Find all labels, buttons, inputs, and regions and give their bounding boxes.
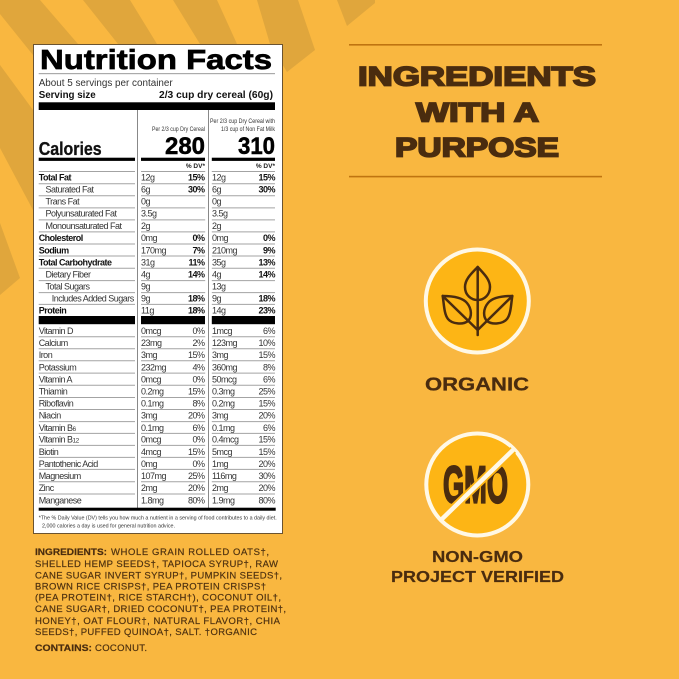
vitamins and minerals rows: 0mg xyxy=(141,459,158,469)
macronutrient rows: 15% xyxy=(258,172,275,182)
heading: ingredients with a purpose xyxy=(349,44,602,177)
vitamins and minerals rows: 116mg xyxy=(212,471,237,481)
macronutrient rows: 210mg xyxy=(212,245,238,255)
macronutrient rows: Total Carbohydrate xyxy=(39,257,112,267)
label: non-GMO project verified xyxy=(391,549,564,586)
footnote: *The % Daily Value (DV) tells you how much a nutrient in a serving of food contributes to a daily diet. xyxy=(39,515,277,521)
macronutrient rows: 9g xyxy=(141,281,151,291)
vitamins and minerals rows: 15% xyxy=(188,447,205,457)
background stripes xyxy=(0,0,375,295)
macronutrient rows: 170mg xyxy=(141,245,167,255)
footnote xyxy=(39,515,277,529)
vitamins and minerals rows: 6% xyxy=(263,326,275,336)
macronutrient rows: Trans Fat xyxy=(46,197,80,207)
vitamins and minerals rows: 50mcg xyxy=(212,374,237,384)
vitamins and minerals rows: 1.8mg xyxy=(141,495,164,505)
vitamins and minerals rows: Potassium xyxy=(39,362,76,372)
ingredients list: INGREDIENTS: xyxy=(35,547,107,558)
macronutrient rows: Total Sugars xyxy=(46,281,91,291)
vitamins and minerals rows: 1mg xyxy=(212,459,229,469)
macronutrient rows: 23% xyxy=(258,306,275,316)
row separator lines xyxy=(39,172,275,494)
macronutrient rows: Total Fat xyxy=(39,172,72,182)
ingredients list: WHOLE GRAIN ROLLED OATS†, xyxy=(111,547,269,558)
vitamins and minerals rows: 0.3mg xyxy=(212,387,235,397)
vitamins and minerals rows: 4% xyxy=(192,362,205,372)
macronutrient rows: 6g xyxy=(212,184,222,194)
vitamins and minerals rows: 15% xyxy=(258,435,275,445)
vitamins and minerals rows: 80% xyxy=(258,495,275,505)
ingredients list: SHELLED HEMP SEEDS†, TAPIOCA SYRUP†, RAW xyxy=(35,559,278,570)
vitamins and minerals rows: Magnesium xyxy=(39,471,81,481)
ingredients list: HONEY†, OAT FLOUR†, NATURAL FLAVOR†, CHIA xyxy=(35,616,281,627)
panel: nutrition facts label xyxy=(34,44,282,534)
percent daily value header xyxy=(186,163,275,170)
macronutrient rows: 2g xyxy=(212,221,222,231)
vitamins and minerals rows: 3mg xyxy=(141,411,158,421)
ingredients list xyxy=(35,547,286,638)
ingredients list: CANE SUGAR†, DRIED COCONUT†, PEA PROTEIN†, xyxy=(35,604,286,615)
macronutrient rows: 0mg xyxy=(141,233,158,243)
vitamins and minerals rows: 6% xyxy=(263,374,275,384)
vitamins and minerals rows: 0% xyxy=(192,326,205,336)
macronutrient rows: 18% xyxy=(188,294,205,304)
vitamins and minerals rows: 0.2mg xyxy=(212,399,235,409)
macronutrient rows: Dietary Fiber xyxy=(46,269,91,279)
vitamins and minerals rows: 8% xyxy=(263,362,275,372)
macronutrient rows: Sodium xyxy=(39,245,69,255)
macronutrient rows: Cholesterol xyxy=(39,233,83,243)
vitamins and minerals rows: Thiamin xyxy=(39,387,68,397)
macronutrient rows: 30% xyxy=(188,184,205,194)
vitamins and minerals rows: 3mg xyxy=(141,350,158,360)
vitamins and minerals rows: 8% xyxy=(192,399,205,409)
macronutrient rows: 0g xyxy=(212,197,222,207)
macronutrient rows: 14% xyxy=(188,269,205,279)
contains statement xyxy=(35,643,147,654)
macronutrient rows: 12g xyxy=(141,172,155,182)
macronutrient rows: 18% xyxy=(188,306,205,316)
vitamins and minerals rows: Iron xyxy=(39,350,53,360)
vitamins and minerals rows: 0% xyxy=(192,435,205,445)
macronutrient rows: 13% xyxy=(258,257,275,267)
macronutrient rows: 0g xyxy=(141,197,151,207)
vitamins and minerals rows: 0mcg xyxy=(141,326,162,336)
macronutrient rows: 0% xyxy=(263,233,275,243)
ingredients list: (PEA PROTEIN†, RICE STARCH†), COCONUT OIL†, xyxy=(35,593,281,604)
macronutrient rows: 11g xyxy=(141,306,154,316)
icon: non-GMO xyxy=(426,434,528,536)
macronutrient rows: 4g xyxy=(212,269,222,279)
vitamins and minerals rows xyxy=(39,326,275,505)
vitamins and minerals rows: Riboflavin xyxy=(39,399,74,409)
vitamins and minerals rows: 6% xyxy=(192,423,205,433)
vitamins and minerals rows: 10% xyxy=(258,338,275,348)
macronutrient rows: Monounsaturated Fat xyxy=(46,221,123,231)
serving size: 2/3 cup dry cereal (60g) xyxy=(159,90,273,101)
column header: with milk: 310 xyxy=(238,133,275,160)
serving size xyxy=(39,90,273,101)
vitamins and minerals rows: 0.1mg xyxy=(141,399,164,409)
macronutrient rows: 0mg xyxy=(212,233,229,243)
vitamins and minerals rows: 3mg xyxy=(212,411,229,421)
macronutrient rows: 18% xyxy=(258,294,275,304)
vitamins and minerals rows: 5mcg xyxy=(212,447,233,457)
macronutrient rows: 9% xyxy=(263,245,275,255)
column header: with milk: 1/3 cup of Non Fat Milk xyxy=(221,126,276,133)
vitamins and minerals rows: 23mg xyxy=(141,338,162,348)
vitamins and minerals rows: 0mcg xyxy=(141,435,162,445)
vitamins and minerals rows: 80% xyxy=(188,495,205,505)
macronutrient rows: Saturated Fat xyxy=(46,184,95,194)
calories label: Calories xyxy=(39,139,102,159)
column header: dry cereal xyxy=(152,126,205,160)
vitamins and minerals rows: 15% xyxy=(188,350,205,360)
black divider bars xyxy=(39,316,275,324)
contains statement: CONTAINS: xyxy=(35,643,92,654)
vitamins and minerals rows: 15% xyxy=(258,350,275,360)
vitamins and minerals rows: 0% xyxy=(192,459,205,469)
vitamins and minerals rows: 0.1mg xyxy=(141,423,164,433)
macronutrient rows xyxy=(39,172,275,316)
icon: non-GMO: GMO xyxy=(443,456,508,514)
vitamins and minerals rows: Vitamin B12 xyxy=(39,435,80,445)
vitamins and minerals rows: 3mg xyxy=(212,350,229,360)
vitamins and minerals rows: 4mcg xyxy=(141,447,162,457)
macronutrient rows: 0% xyxy=(192,233,205,243)
vitamins and minerals rows: 6% xyxy=(263,423,275,433)
column header: with milk xyxy=(210,118,276,160)
macronutrient rows: 11% xyxy=(188,257,205,267)
vitamins and minerals rows: 0mcg xyxy=(141,374,162,384)
macronutrient rows: 13g xyxy=(212,281,226,291)
macronutrient rows: 31g xyxy=(141,257,155,267)
ingredients list: SEEDS†, PUFFED QUINOA†, SALT. †ORGANIC xyxy=(35,627,257,638)
vitamins and minerals rows: 20% xyxy=(258,483,275,493)
heading: ingredients with a purpose: WITH A xyxy=(416,98,539,128)
vitamins and minerals rows: 20% xyxy=(258,459,275,469)
servings per container: About 5 servings per container xyxy=(39,78,173,89)
vitamins and minerals rows: 15% xyxy=(188,387,205,397)
macronutrient rows: 9g xyxy=(212,294,222,304)
vitamins and minerals rows: 30% xyxy=(258,471,275,481)
macronutrient rows: 6g xyxy=(141,184,151,194)
heading: ingredients with a purpose: INGREDIENTS xyxy=(358,62,596,92)
vitamins and minerals rows: 25% xyxy=(258,387,275,397)
vitamins and minerals rows: 0% xyxy=(192,374,205,384)
macronutrient rows: 14% xyxy=(258,269,275,279)
macronutrient rows: 3.5g xyxy=(212,209,228,219)
label: non-GMO project verified: PROJECT VERIFIED xyxy=(391,569,564,586)
vitamins and minerals rows: 1.9mg xyxy=(212,495,235,505)
macronutrient rows: 14g xyxy=(212,306,226,316)
macronutrient rows: Polyunsaturated Fat xyxy=(46,209,118,219)
vitamins and minerals rows: 20% xyxy=(188,483,205,493)
title: Nutrition Facts: Nutrition Facts xyxy=(40,44,272,75)
vitamins and minerals rows: Biotin xyxy=(39,447,59,457)
vitamins and minerals rows: Vitamin B6 xyxy=(39,423,77,433)
macronutrient rows: 3.5g xyxy=(141,209,157,219)
column header: with milk: Per 2/3 cup Dry Cereal with xyxy=(210,118,275,125)
macronutrient rows: 9g xyxy=(141,294,151,304)
vitamins and minerals rows: Zinc xyxy=(39,483,55,493)
column header: dry cereal: Per 2/3 cup Dry Cereal xyxy=(152,126,205,133)
vitamins and minerals rows: Niacin xyxy=(39,411,61,421)
macronutrient rows: 12g xyxy=(212,172,226,182)
vitamins and minerals rows: 25% xyxy=(188,471,205,481)
vitamins and minerals rows: 2mg xyxy=(141,483,158,493)
serving size: Serving size xyxy=(39,90,96,101)
vitamins and minerals rows: 107mg xyxy=(141,471,167,481)
vitamins and minerals rows: Pantothenic Acid xyxy=(39,459,98,469)
vitamins and minerals rows: 0.4mcg xyxy=(212,435,239,445)
column header: dry cereal: 280 xyxy=(165,133,205,160)
vitamins and minerals rows: 123mg xyxy=(212,338,238,348)
vitamins and minerals rows: 2% xyxy=(192,338,205,348)
macronutrient rows: Protein xyxy=(39,306,66,316)
vitamins and minerals rows: 1mcg xyxy=(212,326,233,336)
label: organic: ORGANIC xyxy=(425,374,529,394)
vitamins and minerals rows: 15% xyxy=(258,447,275,457)
macronutrient rows: 15% xyxy=(188,172,205,182)
vitamins and minerals rows: Manganese xyxy=(39,495,82,505)
macronutrient rows: Includes Added Sugars xyxy=(52,294,135,304)
macronutrient rows: 35g xyxy=(212,257,226,267)
macronutrient rows: 2g xyxy=(141,221,151,231)
vitamins and minerals rows: Vitamin D xyxy=(39,326,74,336)
vitamins and minerals rows: 15% xyxy=(258,399,275,409)
ingredients list: BROWN RICE CRISPS†, PEA PROTEIN CRISPS† xyxy=(35,582,266,592)
vitamins and minerals rows: 0.1mg xyxy=(212,423,235,433)
label: non-GMO project verified: NON-GMO xyxy=(432,549,523,566)
vitamins and minerals rows: Calcium xyxy=(39,338,68,348)
contains statement: COCONUT. xyxy=(95,643,147,654)
vitamins and minerals rows: 360mg xyxy=(212,362,238,372)
ingredients list: CANE SUGAR INVERT SYRUP†, PUMPKIN SEEDS†, xyxy=(35,570,282,581)
vitamins and minerals rows: Vitamin A xyxy=(39,374,73,384)
vitamins and minerals rows: 0.2mg xyxy=(141,387,164,397)
percent daily value header: % DV* xyxy=(256,163,275,170)
footnote: 2,000 calories a day is used for general nutrition advice. xyxy=(42,523,175,529)
percent daily value header: % DV* xyxy=(186,163,205,170)
heading: ingredients with a purpose: PURPOSE xyxy=(395,132,559,162)
macronutrient rows: 7% xyxy=(192,245,205,255)
vitamins and minerals rows: 20% xyxy=(188,411,205,421)
vitamins and minerals rows: 20% xyxy=(258,411,275,421)
vitamins and minerals rows: 2mg xyxy=(212,483,229,493)
vitamins and minerals rows: 232mg xyxy=(141,362,167,372)
icon: organic leaves xyxy=(426,250,529,352)
macronutrient rows: 4g xyxy=(141,269,151,279)
macronutrient rows: 30% xyxy=(258,184,275,194)
